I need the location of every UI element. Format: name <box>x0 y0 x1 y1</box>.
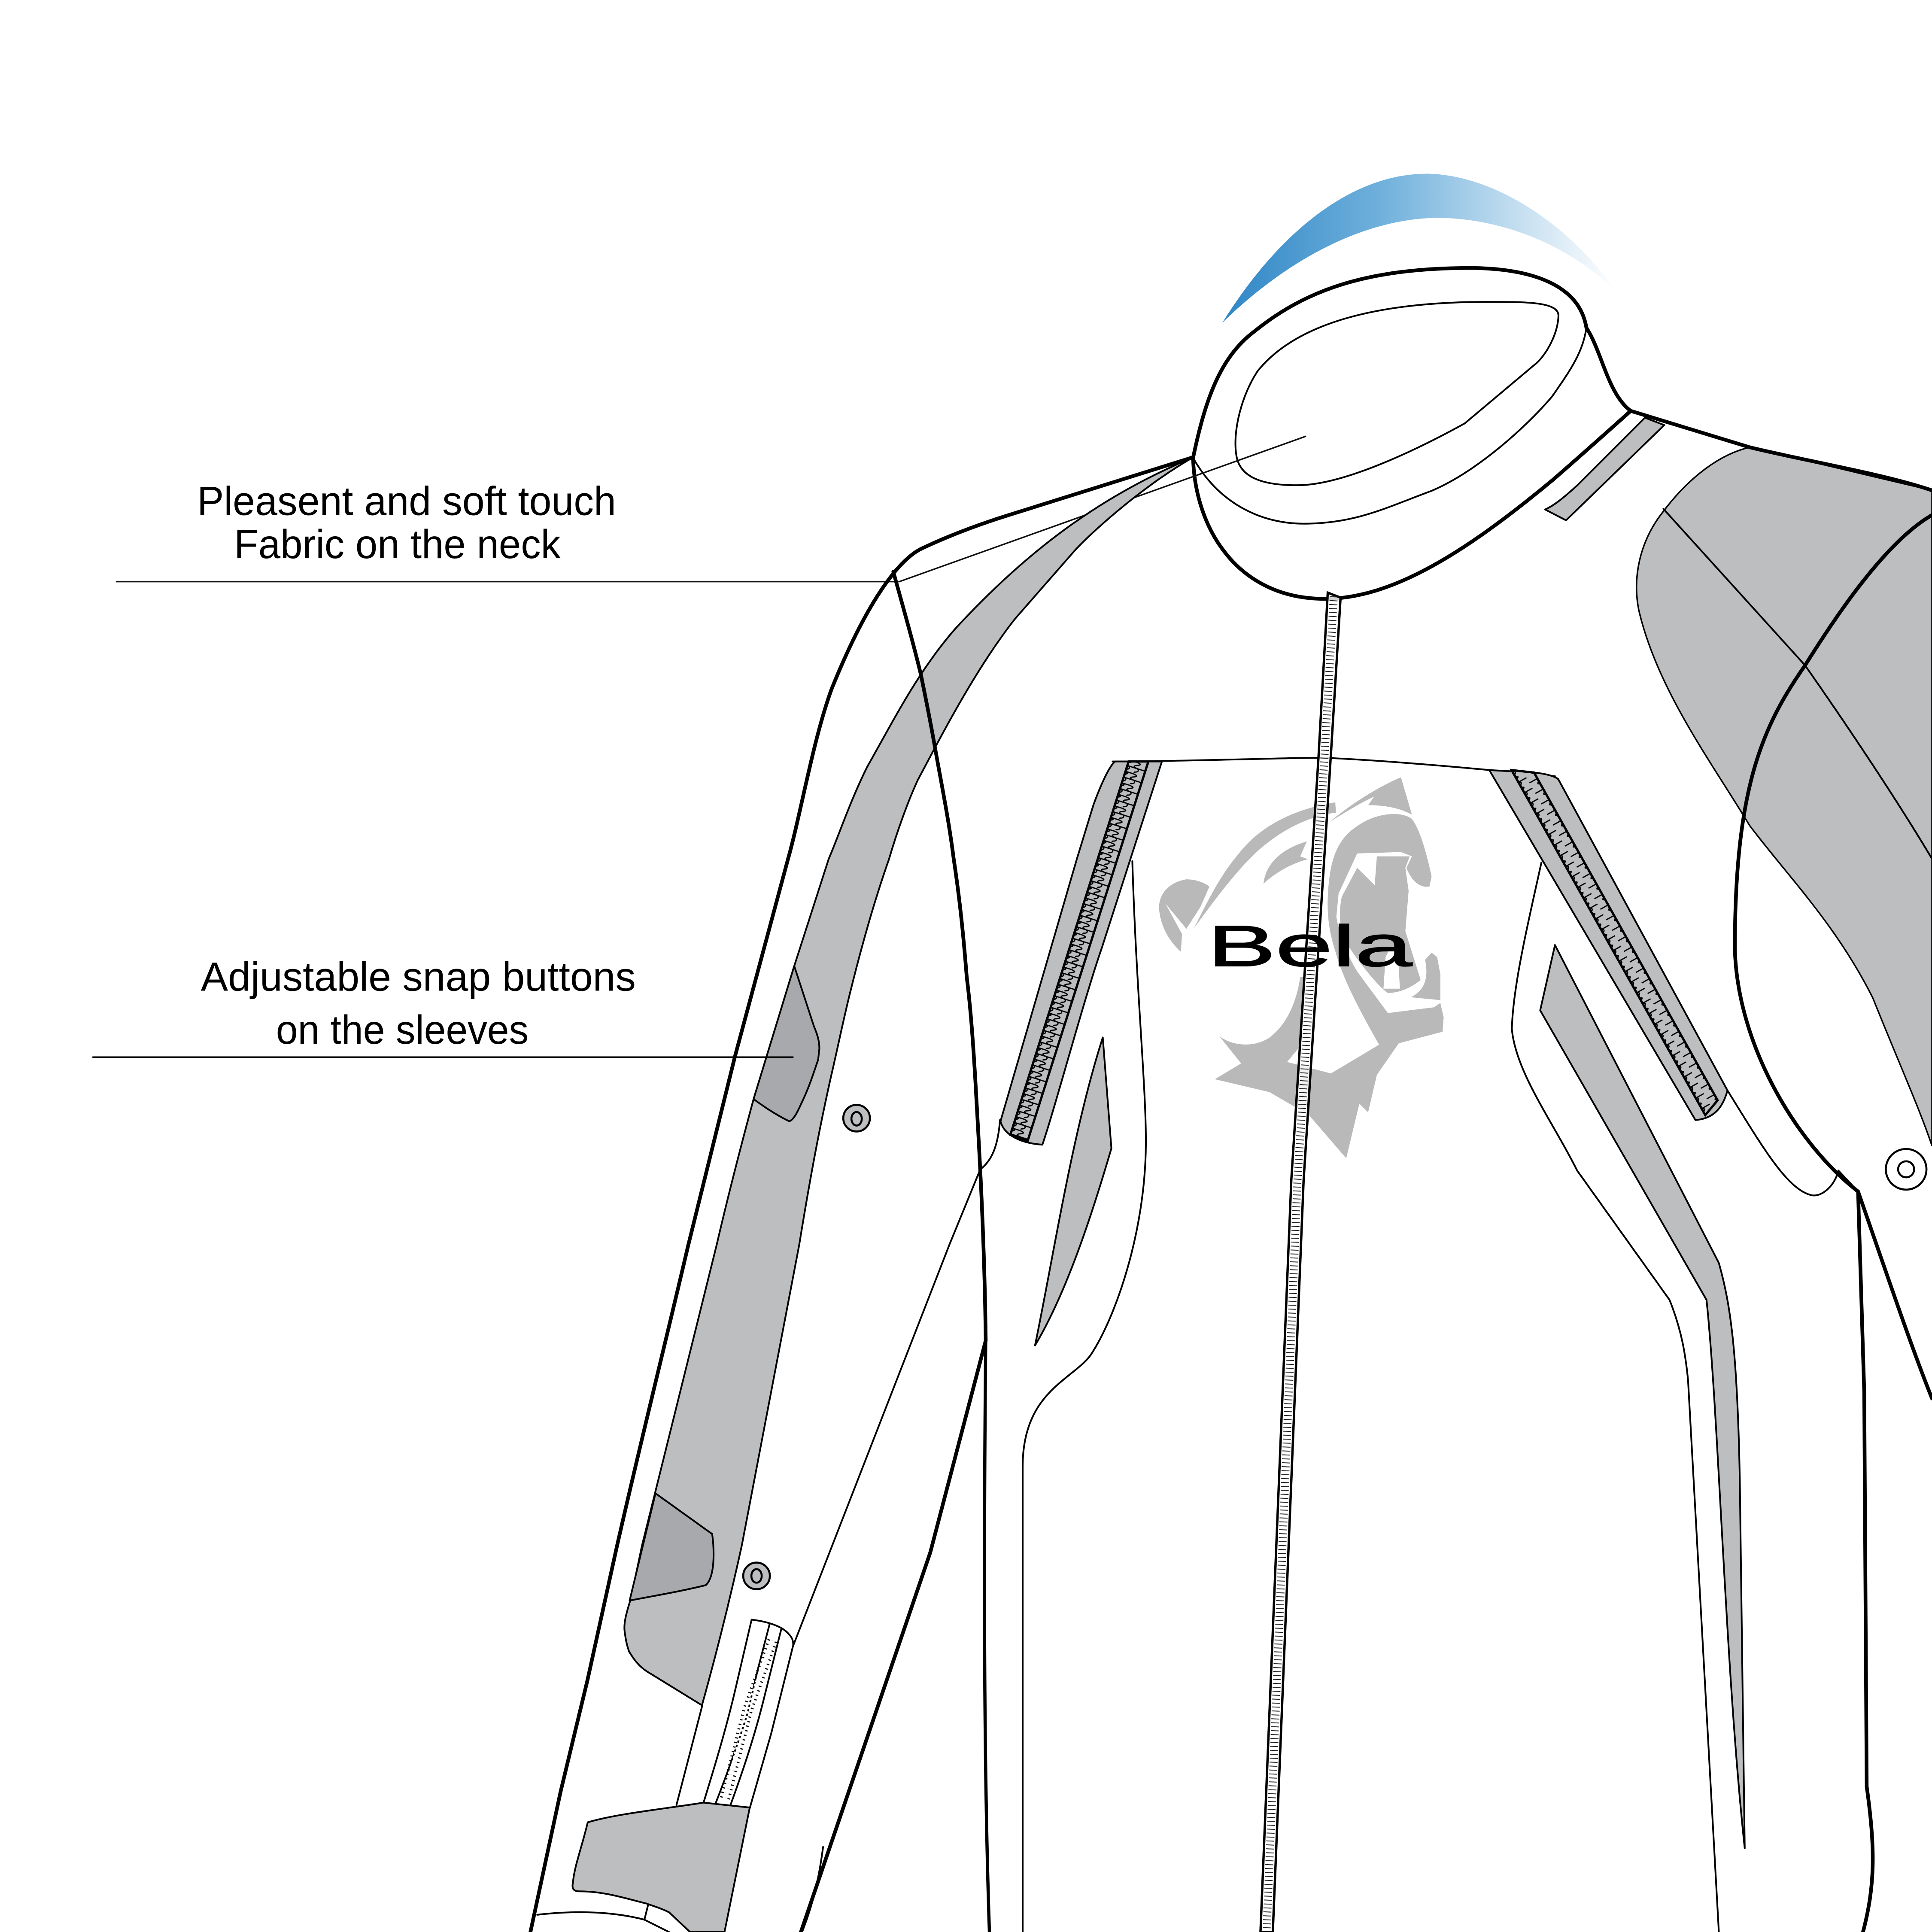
lion head logo mark <box>1159 777 1444 1158</box>
left sleeve grey panel <box>624 457 1194 1705</box>
left lower chest grey insert <box>1035 1037 1112 1346</box>
callout text: neck fabric: Fabric on the neck <box>234 522 561 567</box>
right chest pocket zipper <box>1489 770 1728 1120</box>
icon: blue airflow swoosh above the collar <box>1222 174 1616 323</box>
right shoulder grey panel <box>1637 447 1932 1146</box>
neck strap detail <box>1545 418 1664 520</box>
left sleeve outline <box>530 457 1194 1932</box>
sleeve snap button upper <box>843 1105 870 1131</box>
sleeve darker patch lower <box>630 1493 714 1601</box>
left chest pocket zipper <box>1000 762 1162 1145</box>
callout: snap buttons: Adjustable snap buttons <box>201 954 636 999</box>
right arm snap button <box>1886 1149 1926 1190</box>
leader line from the neck fabric callout <box>116 436 1306 582</box>
sleeve darker patch upper <box>753 966 819 1121</box>
front yoke seam <box>1113 758 1555 776</box>
sleeve snap button lower <box>743 1563 770 1589</box>
right front panel seams <box>1512 863 1858 1932</box>
right lower chest grey insert <box>1540 945 1745 1848</box>
left front panel seams <box>980 861 1146 1932</box>
sleeve zipper <box>704 1619 793 1808</box>
callout: snap buttons <box>92 954 793 1057</box>
sleeve cuff grey panel <box>537 1803 750 1932</box>
right arm outline <box>1631 411 1932 1932</box>
logo wordmark: Bela: Bela <box>1208 914 1413 978</box>
callout: snap buttons: on the sleeves <box>276 1007 529 1053</box>
callout text: neck fabric: Pleasent and soft touch <box>197 479 616 524</box>
callout text: neck fabric <box>197 479 616 567</box>
collar with neck fabric <box>1193 268 1631 599</box>
center front zipper <box>1261 592 1340 1932</box>
